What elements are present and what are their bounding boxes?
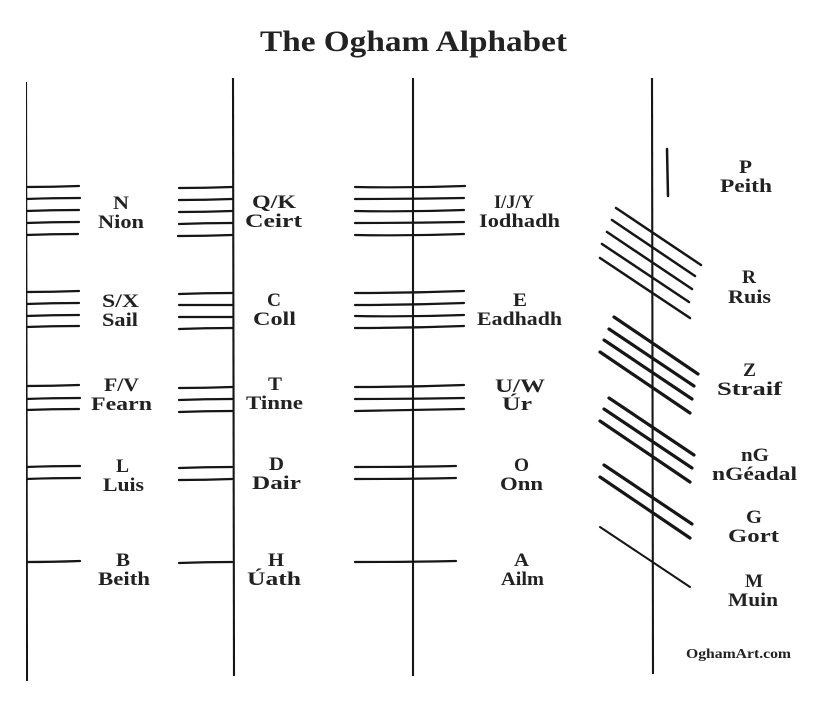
label: D Dair [252, 455, 301, 494]
strokes: C [179, 293, 232, 329]
stem: column 2 [233, 78, 234, 676]
label: Z Straif: Z [743, 361, 756, 381]
label: nG nGeadal: nGéadal [712, 465, 797, 485]
label: F/V Fearn: Fearn [91, 395, 153, 415]
strokes: I/J/Y [355, 186, 465, 235]
label: L Luis [103, 457, 144, 496]
label: B Beith [98, 551, 151, 590]
label: T Tinne [246, 375, 303, 414]
label: C Coll [253, 291, 296, 330]
strokes: nG [600, 398, 694, 482]
label: C Coll: Coll [253, 310, 296, 330]
label: N Nion [98, 194, 145, 233]
title: The Ogham Alphabet [260, 25, 567, 58]
stem: column 4 [652, 78, 653, 674]
label: U/W Ur [495, 377, 546, 415]
label: G Gort: G [746, 508, 762, 528]
strokes: Q/K [178, 187, 232, 236]
label: A Ailm: A [514, 551, 530, 571]
label: M Muin: M [745, 572, 763, 592]
strokes: L [26, 466, 80, 479]
label: T Tinne: Tinne [246, 394, 303, 414]
strokes: F/V [26, 385, 80, 410]
label: O Onn: O [514, 456, 529, 476]
label: O Onn [500, 456, 544, 495]
strokes: P [667, 149, 668, 196]
label: Q/K Ceirt [245, 193, 303, 232]
label: R Ruis: Ruis [728, 288, 771, 308]
label: P Peith: Peith [720, 177, 773, 197]
label: S/X Sail: S/X [102, 292, 140, 312]
strokes: T [179, 387, 232, 412]
label: D Dair: D [269, 455, 284, 475]
strokes: D [179, 467, 232, 480]
label: R Ruis [728, 268, 771, 308]
label: O Onn: Onn [500, 475, 544, 495]
label: T Tinne: T [268, 375, 283, 395]
label: Z Straif [717, 361, 783, 400]
label: H Uath: Úath [247, 568, 302, 590]
label: nG nGeadal: nG [741, 446, 769, 466]
strokes: M [600, 527, 690, 587]
strokes: U/W [355, 385, 464, 411]
strokes: H [179, 562, 232, 563]
label: Q/K Ceirt: Ceirt [245, 212, 303, 232]
label: S/X Sail [102, 292, 140, 331]
strokes: Z [600, 317, 698, 413]
label: R Ruis: R [742, 268, 757, 288]
strokes: N [26, 186, 80, 235]
label: I/J/Y Iodhadh: I/J/Y [494, 193, 535, 213]
label: B Beith: Beith [98, 570, 151, 590]
label: N Nion: N [113, 194, 130, 214]
label: B Beith: B [116, 551, 130, 571]
column 1 letter strokes [26, 186, 80, 562]
column 2 letter strokes [178, 187, 232, 563]
label: F/V Fearn [91, 376, 153, 415]
label: E Eadhadh: Eadhadh [477, 310, 563, 330]
label: Z Straif: Straif [717, 380, 783, 400]
strokes: S/X [26, 291, 79, 327]
strokes: O [355, 466, 456, 479]
label: G Gort [728, 508, 780, 547]
label: S/X Sail: Sail [102, 311, 138, 331]
label: P Peith: P [739, 158, 752, 178]
label: E Eadhadh: E [513, 291, 527, 311]
label: N Nion: Nion [98, 213, 145, 233]
label: L Luis: L [116, 457, 129, 477]
label: P Peith [720, 158, 773, 197]
label: I/J/Y Iodhadh: Iodhadh [479, 212, 561, 232]
label: L Luis: Luis [103, 476, 144, 496]
label: A Ailm [501, 551, 545, 590]
strokes: E [355, 291, 464, 328]
label: E Eadhadh [477, 291, 563, 330]
label: I/J/Y Iodhadh [479, 193, 561, 232]
strokes: B [26, 561, 80, 562]
label: H Uath: H [268, 551, 285, 571]
label: D Dair: Dair [252, 474, 301, 494]
label: U/W Ur: U/W [495, 377, 546, 397]
label: F/V Fearn: F/V [104, 376, 140, 396]
label: Q/K Ceirt: Q/K [252, 193, 297, 213]
label: A Ailm: Ailm [501, 570, 545, 590]
label: M Muin: Muin [728, 591, 779, 611]
label: M Muin [728, 572, 779, 611]
label: H Uath [247, 551, 302, 590]
label: nG nGeadal [712, 446, 797, 485]
column 4 letter strokes [600, 149, 701, 587]
stem: column 3 [412, 78, 414, 676]
credit: OghamArt.com: OghamArt.com [686, 647, 791, 662]
label: U/W Ur: Úr [502, 393, 532, 415]
strokes: G [600, 465, 692, 538]
label: C Coll: C [267, 291, 281, 311]
column 3 letter strokes [355, 186, 465, 562]
strokes: A [355, 561, 456, 562]
label: G Gort: Gort [728, 527, 780, 547]
strokes: R [600, 208, 701, 318]
stem: column 1 [26, 82, 27, 681]
